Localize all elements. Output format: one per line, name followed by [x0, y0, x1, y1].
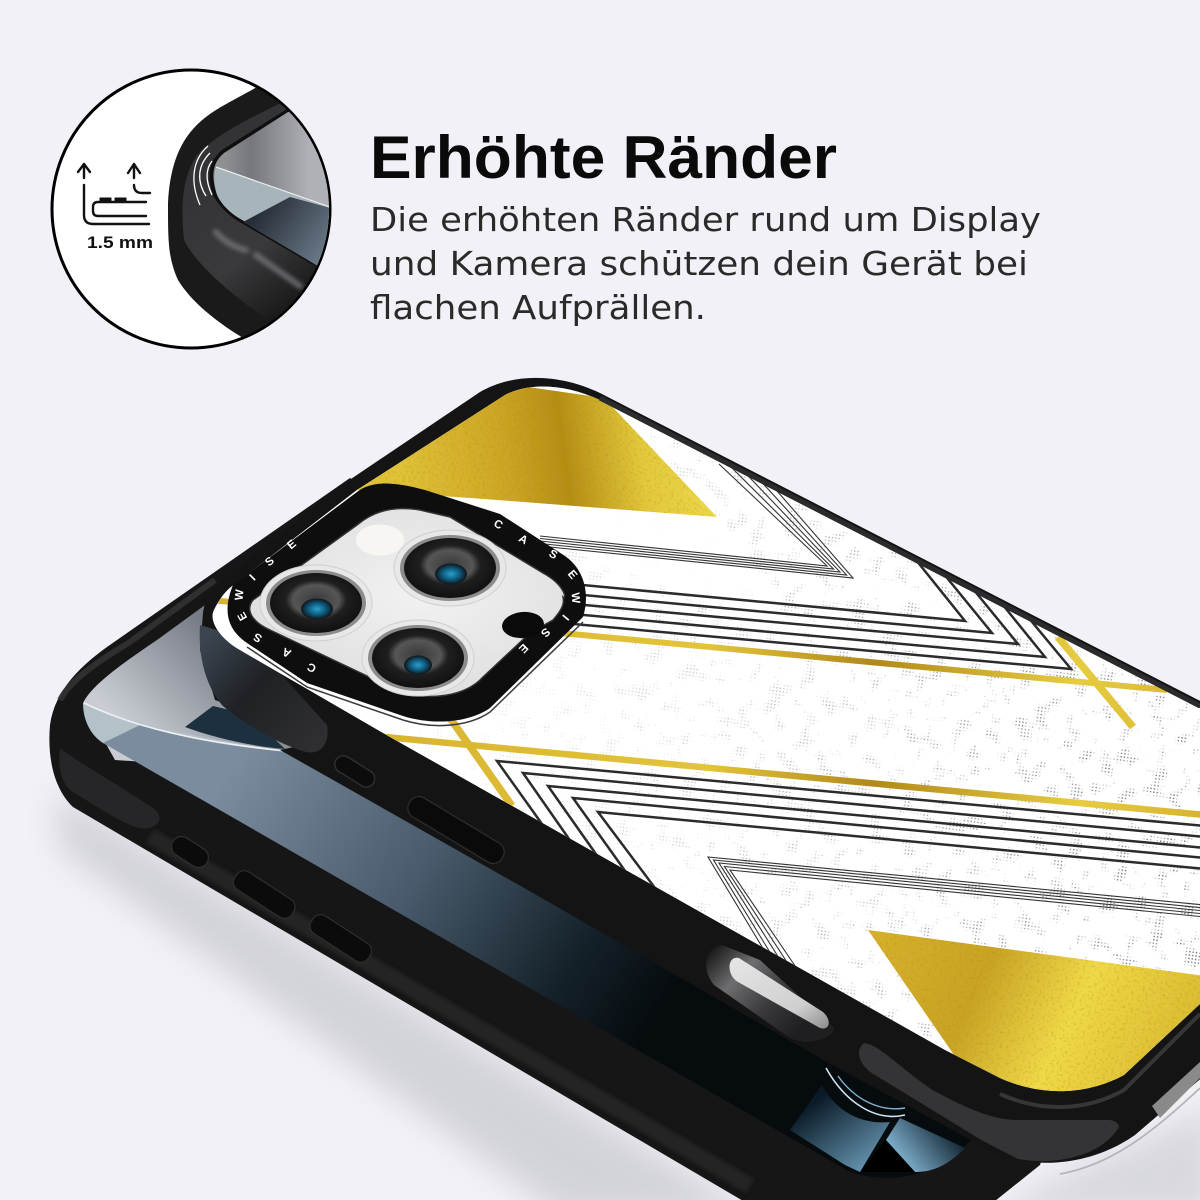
- camera: CASEWISE lettering: I: [248, 573, 258, 583]
- camera: CASEWISE lettering: C: [491, 518, 505, 532]
- camera: glass plate: [250, 509, 565, 696]
- back phone: side buttons: [168, 833, 375, 966]
- drop shadow under phones: [55, 790, 1200, 1200]
- artwork: top gold triangle: [340, 380, 717, 517]
- camera: CASEWISE lettering: W: [234, 589, 246, 601]
- camera: flash: [356, 524, 404, 556]
- camera: lens bottom: [362, 620, 474, 696]
- back phone: screen top reflection: [83, 565, 420, 780]
- artwork: fine lower chevron: [707, 856, 1200, 966]
- artwork: halftone texture: [200, 380, 1200, 1100]
- inset: 1.5 mm label: 1.5 mm: [87, 234, 153, 252]
- camera: CASEWISE lettering: [234, 518, 581, 674]
- camera: CASEWISE lettering: E: [285, 538, 299, 552]
- camera: CASEWISE lettering: E: [565, 568, 579, 582]
- artwork: clear band: [470, 498, 780, 630]
- camera: microphone cutout: [501, 610, 545, 640]
- artwork: fine chevron: [540, 452, 853, 578]
- title: Erhöhte Ränder: [370, 124, 837, 191]
- front phone: silent switch: [332, 753, 378, 790]
- camera: CASEWISE lettering: W: [569, 592, 581, 604]
- back phone: corner grip: [59, 748, 159, 829]
- inset: raised edge icon: [78, 164, 150, 224]
- front phone: translucent corner grip: [859, 1043, 1119, 1161]
- inset: case corner: [168, 88, 329, 337]
- front phone: bottom speaker: [1152, 1062, 1200, 1118]
- camera: CASEWISE lettering: E: [236, 609, 250, 622]
- camera: CASEWISE lettering: I: [559, 612, 571, 622]
- back phone: bumper: [49, 478, 1060, 1200]
- description text: [370, 201, 1041, 327]
- front phone: rim and side: [200, 378, 1200, 1163]
- camera: CASEWISE lettering: A: [281, 645, 293, 659]
- top rim edge: [600, 398, 1200, 706]
- front phone: charging port button: [706, 945, 834, 1042]
- back phone: blue wallpaper glints: [790, 1068, 965, 1172]
- phone case artwork: [200, 380, 1200, 1100]
- front phone (case back): [200, 378, 1200, 1174]
- camera: lens left: [260, 565, 372, 641]
- camera: CASEWISE lettering: S: [538, 625, 552, 639]
- camera: bumper ring: [228, 484, 586, 722]
- camera: CASEWISE lettering: E: [516, 641, 530, 655]
- camera: CASEWISE lettering: S: [547, 548, 560, 562]
- camera: lens right: [394, 530, 506, 606]
- description text: flachen Aufprällen.: [370, 289, 706, 327]
- inset circle: raised edge detail: [52, 70, 345, 348]
- front phone: side grip near camera: [200, 625, 328, 752]
- artwork: upper gold lines: [210, 600, 1167, 727]
- front phone: volume button: [404, 793, 508, 867]
- back phone (screen side): [49, 478, 1060, 1200]
- camera: CASEWISE lettering: S: [251, 630, 264, 644]
- artwork: lower gold lines: [385, 711, 1200, 815]
- camera module: [228, 484, 586, 726]
- artwork: thick chevron: [574, 564, 1074, 670]
- camera: CASEWISE lettering: A: [516, 533, 530, 547]
- back phone: screen main: [103, 725, 1010, 1178]
- description text: und Kamera schützen dein Gerät bei: [370, 245, 1028, 283]
- artwork: bottom gold triangle: [868, 930, 1200, 1100]
- artwork: long lower chevron: [494, 760, 1200, 887]
- camera: CASEWISE lettering: S: [263, 555, 277, 569]
- description text: Die erhöhten Ränder rund um Display: [370, 201, 1041, 239]
- camera: CASEWISE lettering: C: [306, 660, 318, 674]
